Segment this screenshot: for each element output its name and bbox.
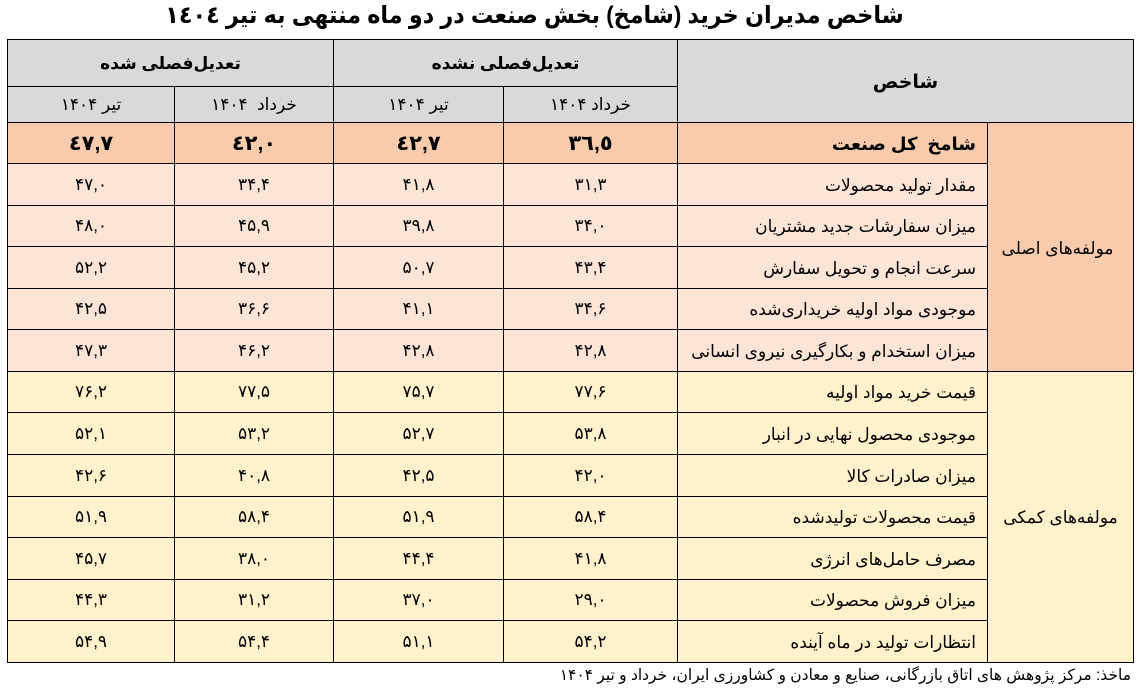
- row: raw material stock: ۴۱,۱: [402, 299, 435, 318]
- row: exports: ۴۲,۶: [75, 466, 107, 484]
- row: delivery speed: ۵۲,۲: [75, 258, 107, 276]
- row: new orders: ۴۵,۹: [238, 216, 270, 235]
- header row: months: خرداد ۱۴۰۴: [211, 94, 297, 114]
- row: raw material stock: موجودی مواد اولیه خریداری‌شده: [749, 300, 976, 319]
- row: exports: ۴۰,۸: [238, 466, 270, 484]
- row: finished goods stock: [8, 413, 987, 454]
- row: sales: ۳۱,۲: [238, 590, 270, 609]
- row: employment: ۴۲,۸: [574, 340, 607, 360]
- row: total industry index: ٤٧,٧: [69, 132, 113, 154]
- header row: groups: مولفه‌های کمکی: [1003, 508, 1118, 527]
- row: sales: میزان فروش محصولات: [810, 591, 976, 610]
- header row: months: تیر ۱۴۰۴: [388, 94, 449, 114]
- row: product price: ۵۸,۴: [238, 507, 270, 526]
- row: exports: ۴۲,۰: [574, 466, 607, 484]
- row: next-month expectations: ۵۴,۹: [75, 632, 107, 650]
- row: raw material stock: ۳۴,۶: [574, 299, 607, 318]
- row: total industry index: ٤٢,٠: [232, 132, 276, 154]
- row: total industry index: [8, 123, 1133, 371]
- title: شاخص مدیران خرید (شامخ) بخش صنعت در دو ماه منتهی به تیر ١٤٠٤: [165, 2, 904, 29]
- row: product price: ۵۱,۹: [402, 507, 435, 526]
- row: sales: ۳۷,۰: [402, 590, 435, 609]
- row: employment: ۴۷,۳: [75, 340, 107, 360]
- row: delivery speed: ۵۰,۷: [402, 258, 435, 276]
- row: delivery speed: سرعت انجام و تحویل سفارش: [763, 258, 976, 278]
- row: finished goods stock: ۵۲,۱: [75, 424, 107, 442]
- row: raw material price: قیمت خرید مواد اولیه: [826, 383, 976, 402]
- row: raw material price: ۷۵,۷: [402, 382, 435, 401]
- source note: ماخذ: مرکز پژوهش های اتاق بازرگانی، صنایع و معادن و کشاورزی ایران، خرداد و تیر ۱۴۰۴: [560, 667, 1131, 684]
- row: employment: ۴۶,۲: [238, 340, 270, 360]
- row: employment: [8, 330, 987, 371]
- row: new orders: ۳۴,۰: [574, 216, 607, 235]
- row: product price: [8, 497, 987, 537]
- row: finished goods stock: ۵۳,۲: [238, 424, 270, 442]
- row: production: ۴۷,۰: [75, 174, 107, 194]
- row: next-month expectations: ۵۱,۱: [402, 632, 435, 650]
- row: product price: قیمت محصولات تولیدشده: [793, 508, 976, 527]
- row: energy use: [8, 538, 987, 579]
- row: next-month expectations: ۵۴,۲: [574, 632, 607, 650]
- row: raw material stock: ۳۶,۶: [238, 299, 270, 318]
- row: energy use: مصرف حامل‌های انرژی: [810, 550, 976, 568]
- row: production: ۳۱,۳: [574, 174, 607, 194]
- row: raw material price: [8, 372, 1133, 662]
- row: new orders: میزان سفارشات جدید مشتریان: [755, 217, 976, 236]
- row: new orders: ۴۸,۰: [75, 216, 107, 235]
- row: employment: ۴۲,۸: [402, 340, 435, 360]
- row: next-month expectations: ۵۴,۴: [238, 632, 270, 650]
- row: total industry index: ٤٢,٧: [396, 132, 441, 154]
- row: raw material stock: ۴۲,۵: [75, 299, 107, 318]
- row: production: مقدار تولید محصولات: [825, 176, 976, 194]
- header row: groups: تعدیل‌فصلی شده: [100, 54, 241, 73]
- header row: months: [8, 87, 677, 122]
- row: production: [8, 164, 987, 205]
- header row: months: خرداد ۱۴۰۴: [550, 94, 631, 114]
- header row: groups: شاخص: [873, 72, 938, 92]
- row: delivery speed: ۴۵,۲: [238, 258, 270, 276]
- row: exports: میزان صادرات کالا: [847, 466, 976, 486]
- row: finished goods stock: ۵۳,۸: [574, 424, 607, 442]
- row: raw material price: ۷۷,۵: [238, 382, 270, 401]
- row: sales: [8, 580, 987, 620]
- row: energy use: ۴۱,۸: [574, 548, 607, 568]
- row: energy use: ۴۵,۷: [75, 548, 107, 568]
- row: next-month expectations: انتظارات تولید در ماه آینده: [790, 632, 976, 652]
- row: sales: ۴۴,۳: [75, 590, 107, 609]
- row: exports: [8, 455, 987, 496]
- row: raw material price: ۷۶,۲: [75, 382, 107, 401]
- row: total industry index: شامخ کل صنعت: [832, 134, 976, 154]
- row: raw material stock: [8, 289, 987, 329]
- row: finished goods stock: ۵۲,۷: [402, 424, 435, 442]
- row: delivery speed: ۴۳,۴: [574, 258, 607, 276]
- row: employment: میزان استخدام و بکارگیری نیروی انسانی: [691, 342, 976, 360]
- row: raw material price: ۷۷,۶: [574, 382, 607, 401]
- row: new orders: [8, 206, 987, 246]
- row: product price: ۵۸,۴: [574, 507, 607, 526]
- row: production: ۳۴,۴: [238, 174, 270, 194]
- row: energy use: ۳۸,۰: [238, 548, 270, 568]
- row: new orders: ۳۹,۸: [402, 216, 435, 235]
- header row: months: تیر ۱۴۰۴: [61, 94, 121, 114]
- row: sales: ۲۹,۰: [574, 590, 607, 609]
- header row: groups: تعدیل‌فصلی نشده: [432, 54, 579, 73]
- header row: groups: مولفه‌های اصلی: [1002, 238, 1113, 258]
- row: finished goods stock: موجودی محصول نهایی در انبار: [763, 424, 976, 444]
- row: next-month expectations: [8, 621, 987, 662]
- row: production: ۴۱,۸: [402, 174, 435, 194]
- row: delivery speed: [8, 247, 987, 288]
- row: product price: ۵۱,۹: [75, 507, 107, 526]
- row: total industry index: ٣٦,٥: [568, 132, 613, 154]
- row: energy use: ۴۴,۴: [402, 548, 435, 568]
- row: exports: ۴۲,۵: [402, 466, 435, 484]
